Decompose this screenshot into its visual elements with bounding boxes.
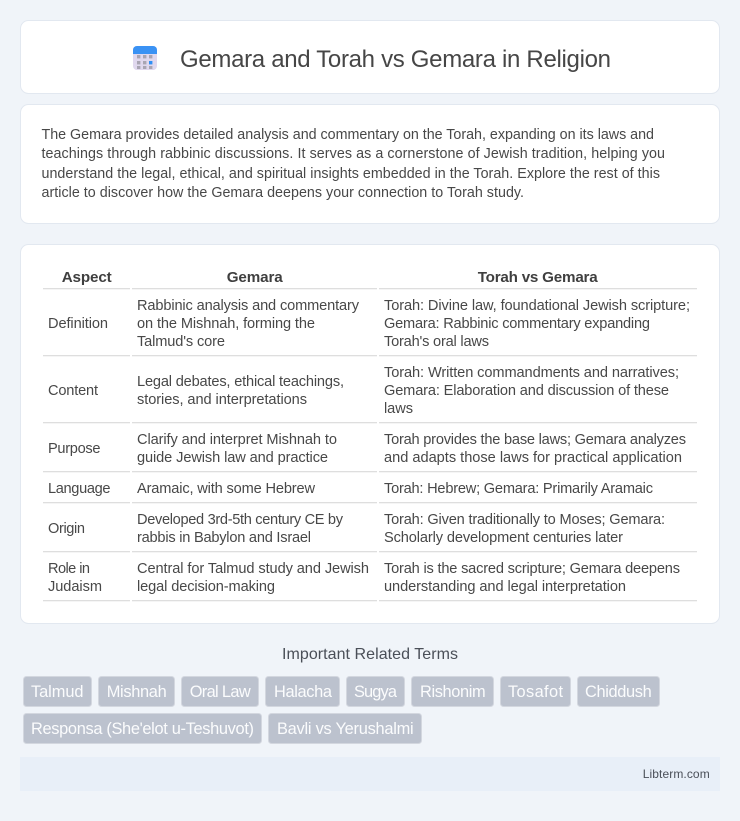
table row: purpose: Torah provides the base laws; Gemara analyzes (384, 432, 686, 448)
tag: Oral Law: Oral Law (190, 683, 251, 701)
tag: Responsa: Responsa (She'elot u-Teshuvot) (31, 720, 254, 738)
table row: language: Aramaic, with some Hebrew (137, 481, 315, 497)
table row: role in Judaism: Role in (48, 561, 90, 577)
table row: purpose: Clarify and interpret Mishnah to (137, 432, 337, 448)
footer credit: Libterm.com (643, 767, 710, 781)
tag: Mishnah: Mishnah (107, 683, 167, 701)
table row: definition: on the Mishnah, forming the (137, 316, 315, 332)
text block: introduction paragraph: teachings through rabbinic discussions. It serves as a cornerstone of Jewish tradition, helping you (42, 146, 665, 162)
tag: Bavli vs Yerushalmi: Bavli vs Yerushalmi (277, 720, 414, 738)
tag: Tosafot (500, 676, 570, 706)
table row: content: Gemara: Elaboration and discussion of these (384, 383, 669, 399)
tag: Halacha: Halacha (274, 683, 333, 701)
table header row (62, 269, 598, 286)
tag: Halacha (266, 676, 340, 706)
tag: Rishonim: Rishonim (420, 683, 486, 701)
title: Gemara and Torah vs Gemara in Religion (180, 46, 611, 73)
table row: role in Judaism: Torah is the sacred scripture; Gemara deepens (384, 561, 680, 577)
panel: header (20, 20, 720, 94)
table row: role in Judaism: legal decision-making (137, 579, 275, 595)
footer (20, 757, 720, 791)
table row: origin: rabbis in Babylon and Israel (137, 530, 311, 546)
table row: definition: Rabbinic analysis and commentary (137, 298, 360, 314)
table row: purpose: guide Jewish law and practice (137, 450, 328, 466)
table row: definition: Torah: Divine law, foundational Jewish scripture; (384, 298, 690, 314)
tag: Oral Law (182, 676, 258, 706)
table row: definition: Definition (48, 316, 108, 332)
table row: purpose: Purpose (48, 441, 100, 457)
icon: calendar (133, 46, 157, 70)
table row: role in Judaism (48, 561, 680, 595)
table row: content: Legal debates, ethical teachings, (137, 374, 344, 390)
tag: Sugya (346, 676, 404, 706)
table row: origin: Origin (48, 521, 85, 537)
table row: origin: Developed 3rd-5th century CE by (137, 512, 344, 528)
table row: origin: Scholarly development centuries later (384, 530, 623, 546)
tag: Chiddush: Chiddush (585, 683, 652, 701)
table row: definition: Talmud's core (137, 334, 225, 350)
table row: origin (48, 512, 665, 546)
table row: content: Content (48, 383, 98, 399)
table row: definition: Gemara: Rabbinic commentary expanding (384, 316, 650, 332)
table row: content (48, 365, 679, 417)
tag: Rishonim (412, 676, 494, 706)
table row: role in Judaism: Judaism (48, 579, 102, 595)
table row: purpose: and adapts those laws for practical application (384, 450, 682, 466)
table row: definition: Torah's oral laws (384, 334, 489, 350)
text block: introduction paragraph (42, 127, 665, 201)
table row: definition (48, 298, 690, 350)
table row: purpose (48, 432, 686, 466)
tag: Talmud (24, 676, 92, 706)
table row: origin: Torah: Given traditionally to Moses; Gemara: (384, 512, 665, 528)
table header row: Aspect (62, 269, 112, 286)
heading: important related terms: Important Related Terms (282, 646, 458, 663)
tag: Sugya: Sugya (354, 683, 398, 701)
tag: Bavli vs Yerushalmi (268, 714, 422, 744)
text block: introduction paragraph: understand the legal, ethical, and spiritual insights embedded in the Torah. Explore the rest of this (42, 166, 660, 182)
tag: Tosafot: Tosafot (508, 683, 563, 701)
tag: Mishnah (98, 676, 174, 706)
table row: content: laws (384, 401, 413, 417)
table row: role in Judaism: Central for Talmud study and Jewish (137, 561, 369, 577)
table row: language: Language (48, 481, 110, 497)
table row: content: stories, and interpretations (137, 392, 307, 408)
table header row: Gemara (227, 269, 283, 286)
tag: Responsa (24, 714, 262, 744)
table row: language (48, 481, 653, 497)
table row: language: Torah: Hebrew; Gemara: Primarily Aramaic (384, 481, 653, 497)
table row: role in Judaism: understanding and legal interpretation (384, 579, 626, 595)
tag: Talmud: Talmud (31, 683, 84, 701)
tag: Chiddush (578, 676, 660, 706)
panel: comparison table (20, 244, 720, 624)
text block: introduction paragraph: article to discover how the Gemara deepens your connection to Torah study. (42, 185, 524, 201)
text block: introduction paragraph: The Gemara provides detailed analysis and commentary on the Torah, expanding on its laws and (42, 127, 654, 143)
panel: related term tags (24, 676, 660, 744)
table row: content: Torah: Written commandments and narratives; (384, 365, 679, 381)
panel: introduction (20, 104, 720, 224)
table header row: Torah vs Gemara (478, 269, 598, 286)
